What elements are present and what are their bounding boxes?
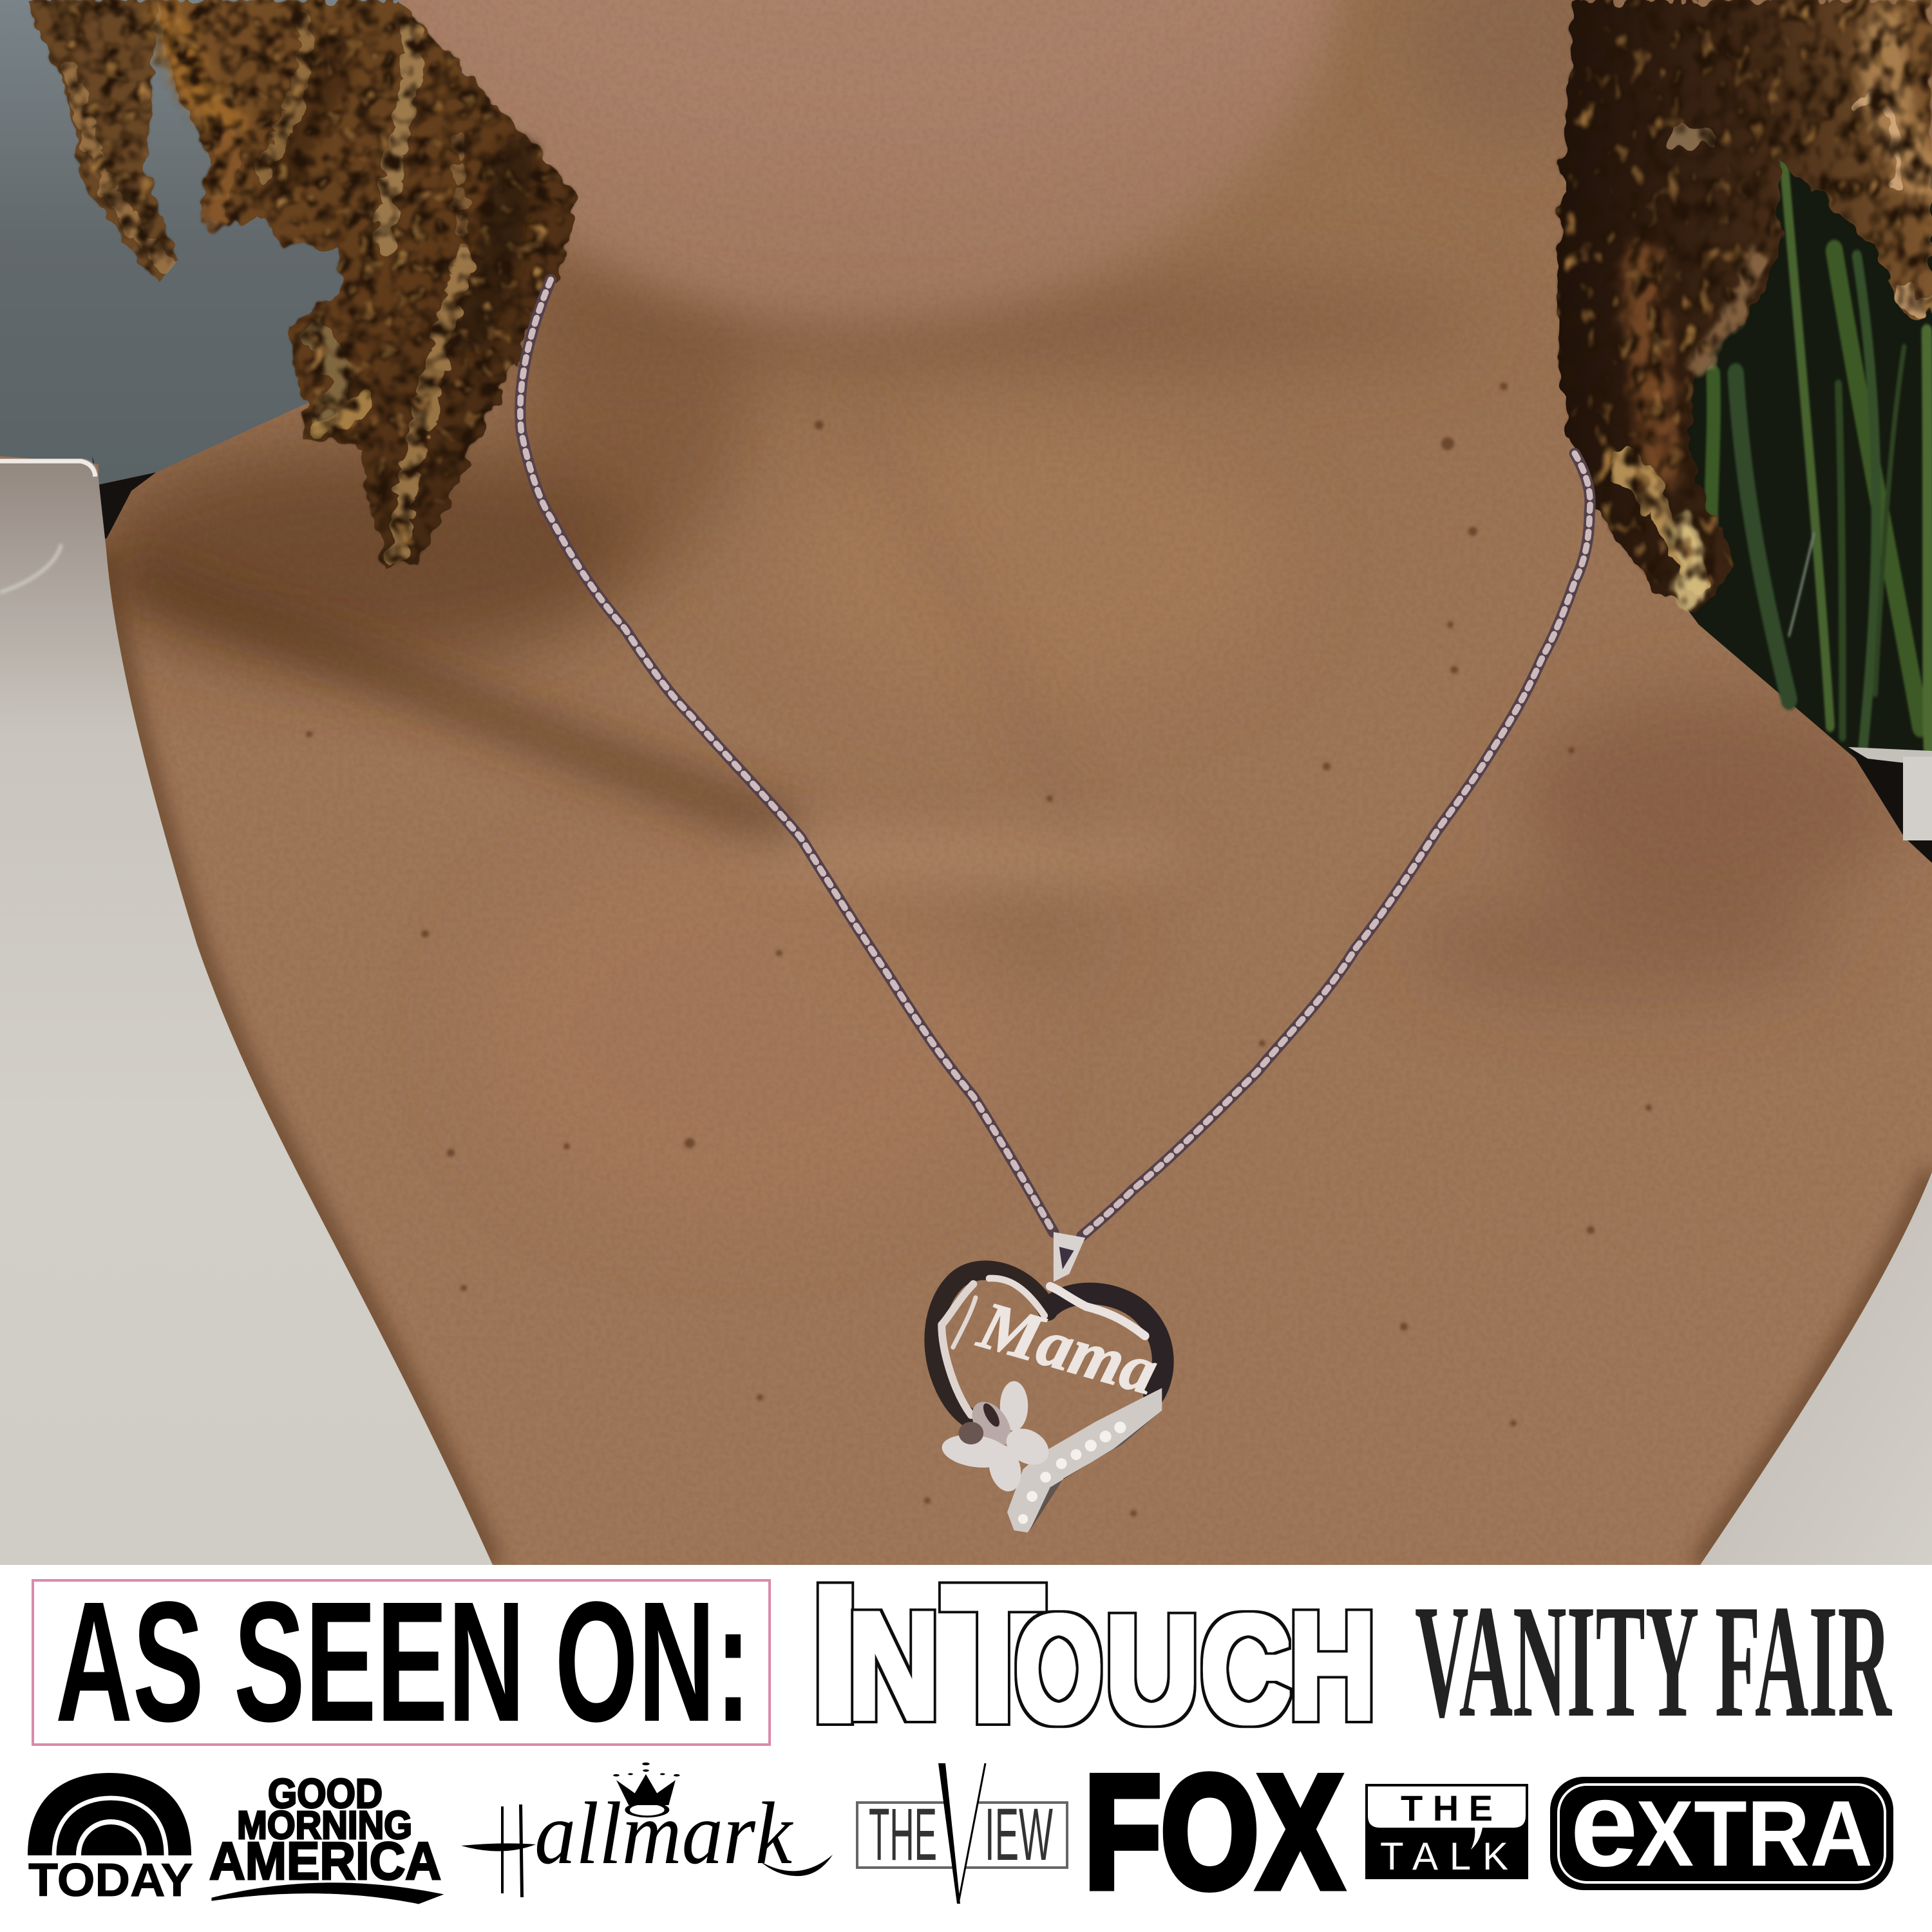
panel: press logos strip <box>0 1545 1932 1932</box>
logo: Hallmark <box>461 1763 833 1897</box>
logo: Good Morning America: MORNING <box>237 1803 412 1847</box>
logo: Today <box>28 1773 193 1906</box>
logo: The View <box>857 1763 1067 1904</box>
logo: Extra: XTRA <box>1636 1781 1873 1886</box>
pendant bale <box>1054 1232 1085 1282</box>
heading box: as seen on: AS SEEN ON: <box>55 1566 751 1757</box>
logo: In Touch: N <box>848 1581 940 1751</box>
logo: Fox: FOX <box>1084 1742 1342 1921</box>
wall background <box>0 0 571 542</box>
hair: right curls <box>1555 0 1932 614</box>
blouse: right lapel and collar <box>1700 747 1932 1565</box>
logo: The Talk: THE <box>1401 1788 1493 1828</box>
logo: The Talk <box>1365 1784 1528 1879</box>
logo: Good Morning America: AMERICA <box>209 1831 441 1891</box>
plants <box>1567 80 1932 801</box>
crown <box>613 1763 680 1817</box>
heart outline <box>934 1271 1163 1422</box>
blouse: shadow edge on skin <box>106 550 1932 1565</box>
logo: In Touch: T <box>942 1545 1045 1763</box>
black under collar <box>93 456 156 542</box>
butterfly <box>940 1381 1056 1495</box>
heading box: as seen on <box>33 1566 770 1757</box>
stone band <box>1007 1388 1162 1533</box>
logo: Good Morning America <box>209 1770 441 1903</box>
necklace chain <box>520 279 1590 1236</box>
logo: In Touch: C <box>1200 1584 1291 1754</box>
logo: In Touch: I <box>809 1545 862 1763</box>
logo: Extra: e <box>1570 1756 1638 1892</box>
freckles <box>306 383 1652 1517</box>
heart pendant <box>934 1232 1166 1533</box>
script word Mama: Mama <box>971 1287 1166 1409</box>
logo: Hallmark: allmark <box>535 1784 794 1882</box>
collar highlight <box>0 461 95 477</box>
skin shading <box>105 0 1899 1009</box>
logo: The View: THE <box>869 1794 937 1876</box>
chin <box>374 0 1340 322</box>
logo: The View: IEW <box>985 1794 1053 1876</box>
hair: left curls <box>24 0 577 565</box>
logo: Today: TODAY <box>28 1855 193 1906</box>
logo: In Touch: U <box>1105 1584 1199 1754</box>
logo: The Talk: TALK <box>1380 1835 1508 1878</box>
logo: Good Morning America: GOOD <box>268 1770 383 1817</box>
logo: In Touch: H <box>1289 1581 1376 1751</box>
logo: In Touch <box>809 1545 1376 1763</box>
blouse: left lapel <box>0 459 493 1565</box>
logo: Extra <box>1550 1756 1893 1892</box>
logo: In Touch: O <box>1015 1584 1103 1754</box>
